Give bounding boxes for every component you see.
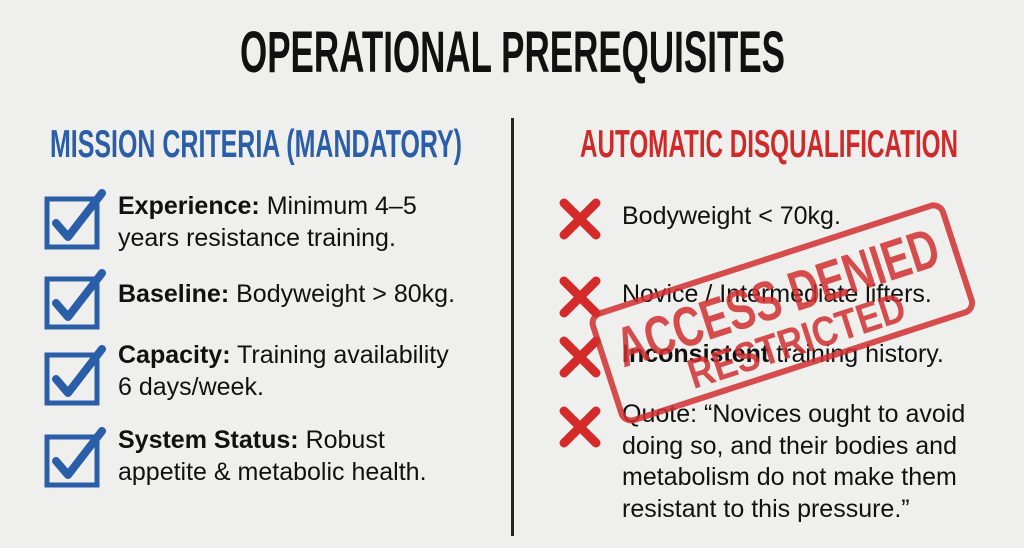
text: system status: appetite & metabolic health. [118,458,427,486]
panel: mission criteria [44,189,455,488]
text: capacity [118,341,449,400]
icon: x 1 [560,198,600,240]
text: novice: Novice / Intermediate lifters. [622,280,932,308]
text: quote: metabolism do not make them [622,463,957,491]
text: inconsistent: Inconsistent training history. [622,340,944,368]
icon: checkbox 3 [44,345,106,406]
text: experience: Experience: Minimum 4–5 [118,192,417,220]
text: capacity: Capacity: Training availability [118,341,449,369]
text: quote [622,400,965,522]
icon: checkbox 2 [44,269,106,330]
divider [511,118,514,536]
icon: x 3 [560,336,600,378]
text: baseline: Baseline: Bodyweight > 80kg. [118,280,455,308]
text: system status: System Status: Robust [118,426,385,454]
heading: mission criteria: MISSION CRITERIA (MANDATORY) [50,123,462,166]
stamp: access denied: RESTRICTED [682,283,911,398]
text: system status [118,426,427,486]
icon: checkbox 4 [44,427,106,488]
headings [50,20,958,166]
text: quote: resistant to this pressure.” [622,494,910,522]
text: bodyweight: Bodyweight < 70kg. [622,202,841,230]
stamp: access denied [590,202,975,424]
icon: checkbox 1 [44,189,106,250]
text: capacity: 6 days/week. [118,372,264,400]
text: quote: Quote: “Novices ought to avoid [622,400,965,428]
text: quote: doing so, and their bodies and [622,432,957,460]
icon: x 4 [560,406,600,448]
panel: disqualification [560,198,965,522]
icon: x 2 [560,276,600,318]
text: experience: years resistance training. [118,224,396,252]
text: experience [118,192,417,252]
